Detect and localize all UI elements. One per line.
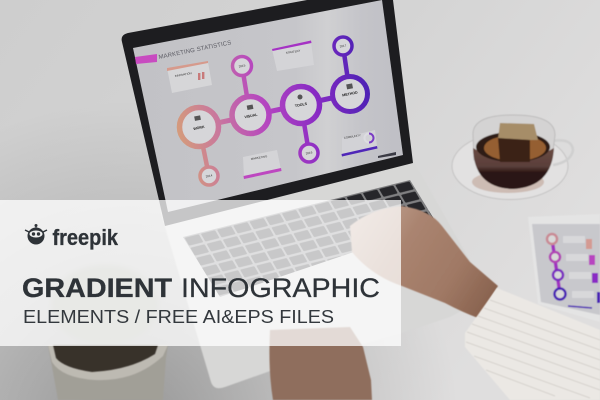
card: community	[342, 130, 378, 156]
wordmark: freepik	[52, 225, 119, 250]
icon: freepik mascot	[25, 224, 47, 244]
cup handle	[553, 140, 573, 165]
card: community: COMMUNITY	[343, 133, 361, 140]
card: strategy	[272, 40, 314, 71]
pot inner wall	[48, 345, 168, 380]
tablet	[528, 214, 600, 322]
screen title bar	[135, 54, 157, 64]
subheading: ELEMENTS / FREE AI&EPS FILES	[23, 306, 334, 327]
laptop lid	[122, 0, 413, 226]
node: visual: VISUAL	[244, 113, 259, 119]
node: tools: TOOLS	[295, 102, 308, 108]
node: small 2015: 2015	[238, 63, 246, 69]
node: visual	[232, 96, 269, 134]
screen title: MARKETING STATISTICS	[158, 40, 232, 61]
node: small 2016: 2016	[305, 150, 313, 156]
sweater sleeve	[465, 288, 600, 400]
node: method	[332, 76, 368, 112]
card: marketing: MARKETING	[250, 154, 268, 161]
laptop base	[160, 160, 490, 388]
banner panel	[0, 200, 401, 346]
node: small 2017	[334, 37, 352, 55]
card: innovation	[167, 61, 212, 93]
card: strategy: STRATEGY	[285, 48, 301, 55]
laptop screen	[133, 0, 403, 212]
saucer	[452, 132, 568, 200]
node: small 2015	[232, 56, 252, 76]
left hand	[269, 327, 372, 400]
node: small 2017: 2017	[339, 43, 347, 49]
pot	[48, 345, 168, 400]
heading	[22, 273, 380, 303]
tea surface	[476, 132, 550, 162]
cup glass wall	[473, 115, 555, 160]
node: small 2014	[200, 167, 218, 185]
logo: freepik	[25, 224, 119, 250]
timeline connectors	[199, 46, 350, 176]
screen logo marks	[378, 152, 396, 158]
potted plant	[48, 265, 168, 400]
tea bag	[498, 123, 538, 140]
node: small 2016	[300, 144, 318, 162]
saucer shadow	[472, 171, 544, 193]
node: small 2014: 2014	[205, 173, 213, 179]
soil	[53, 345, 158, 372]
card: marketing	[243, 150, 282, 179]
tea cup on saucer	[452, 115, 573, 200]
right hand	[350, 206, 498, 318]
node: tools	[282, 86, 320, 124]
tea body	[473, 148, 554, 189]
laptop keyboard	[183, 180, 437, 297]
node: work	[180, 108, 218, 146]
card: innovation: INNOVATION	[174, 71, 192, 78]
heading: GRADIENT	[22, 273, 172, 303]
heading: INFOGRAPHIC	[181, 273, 380, 303]
node: method: METHOD	[342, 90, 358, 97]
succulent leaves	[51, 265, 159, 345]
node: work: WORK	[193, 125, 205, 131]
